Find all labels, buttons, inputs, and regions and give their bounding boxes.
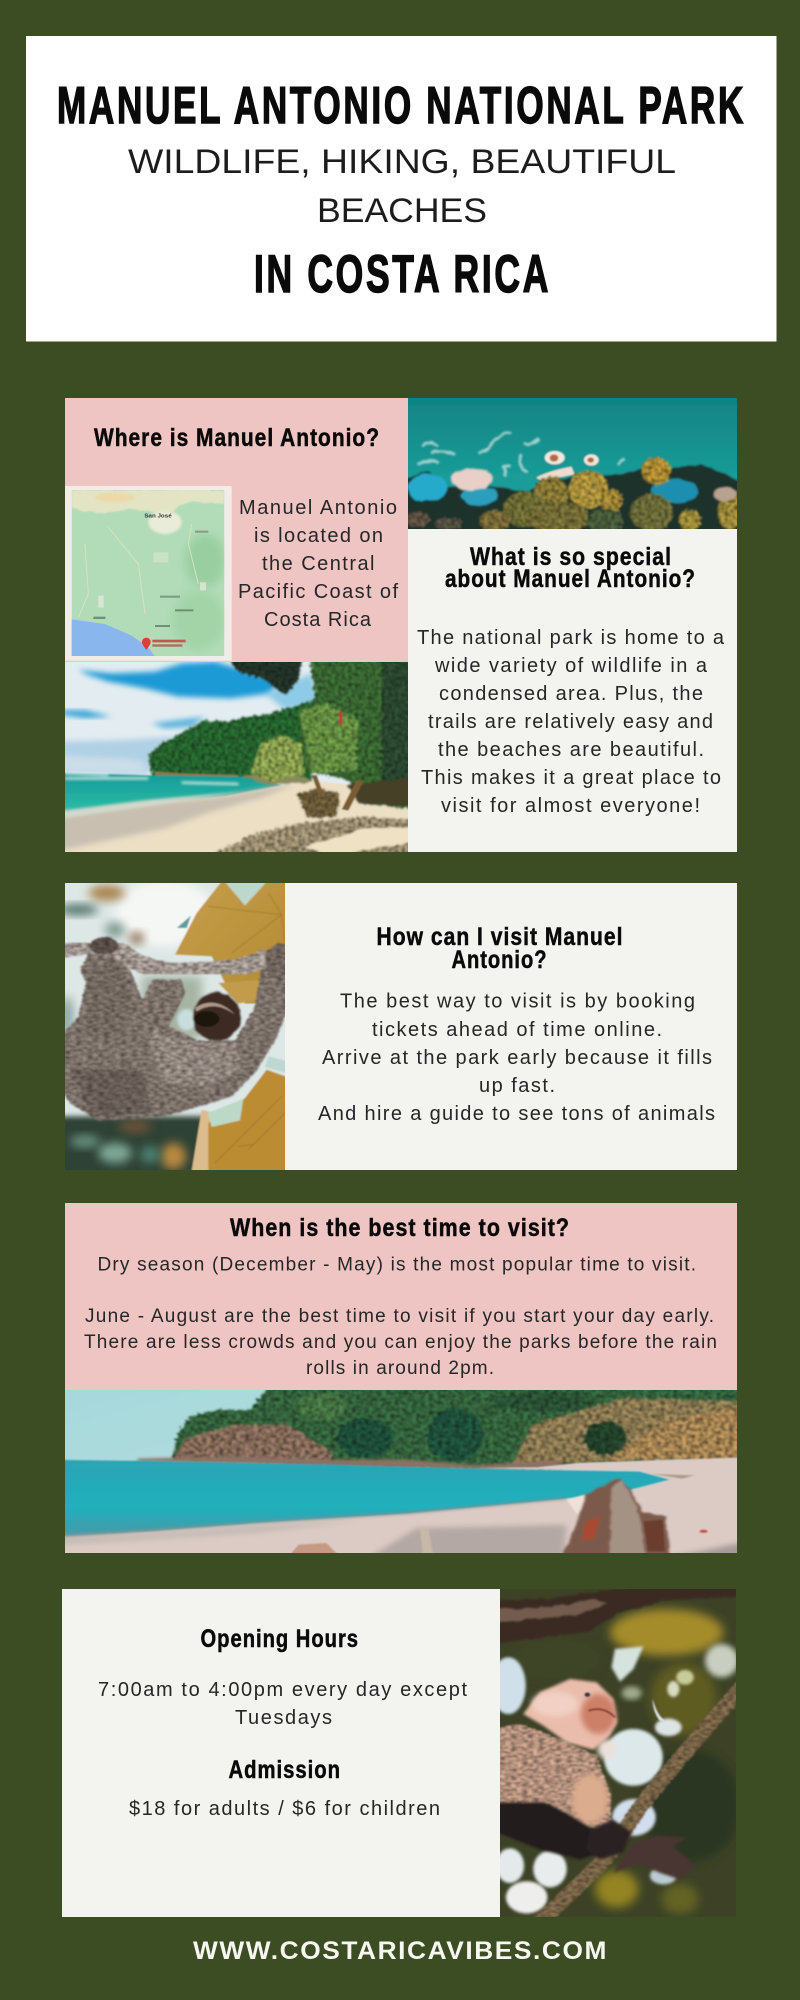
text: opening hours: 7:00am to 4:00pm every day except xyxy=(98,1679,467,1701)
text: special description: The national park is home to a xyxy=(417,627,725,649)
photo: aerial ocean and coast xyxy=(408,398,737,529)
subtitle: BEACHES xyxy=(317,192,487,230)
text: how to visit description xyxy=(318,990,715,1125)
heading: how to visit: Antonio? xyxy=(452,946,548,974)
text: best time description: rolls in around 2pm. xyxy=(306,1358,494,1379)
text: how to visit description: up fast. xyxy=(479,1075,555,1097)
heading: what is special xyxy=(445,543,696,593)
heading: what is special: What is so special xyxy=(470,543,672,571)
heading: how to visit: How can I visit Manuel xyxy=(376,923,624,951)
panel: when is the best time xyxy=(65,1203,737,1390)
panel: opening hours and admission xyxy=(62,1589,500,1917)
text: how to visit description: tickets ahead of time online. xyxy=(372,1019,662,1041)
heading: how to visit xyxy=(376,923,624,974)
text: location: is located on xyxy=(254,525,383,547)
text: how to visit description: Arrive at the park early because it fills xyxy=(322,1047,712,1069)
heading: best time: When is the best time to visit? xyxy=(230,1214,570,1242)
text: location: Manuel Antonio xyxy=(239,497,397,519)
label: San José: San José xyxy=(144,514,172,520)
text: opening hours xyxy=(98,1679,467,1729)
text: special description xyxy=(417,627,725,817)
text: admission price: $18 for adults / $6 for children xyxy=(129,1798,440,1820)
text: special description: condensed area. Plus, the xyxy=(439,683,703,705)
panel: how can I visit xyxy=(285,883,737,1170)
text: how to visit description: And hire a guide to see tons of animals xyxy=(318,1103,715,1125)
text: best time description: June - August are the best time to visit if you start your day early. xyxy=(85,1306,714,1327)
text: opening hours: Tuesdays xyxy=(235,1707,332,1729)
text: best time description: Dry season (December - May) is the most popular time to visit. xyxy=(98,1254,696,1275)
text: special description: visit for almost everyone! xyxy=(441,795,700,817)
subtitle: WILDLIFE, HIKING, BEAUTIFUL xyxy=(128,143,676,181)
map xyxy=(65,486,232,661)
text: best time description: There are less crowds and you can enjoy the parks before the rain xyxy=(84,1332,717,1353)
text: location: Costa Rica xyxy=(264,609,372,631)
panel: title xyxy=(26,36,776,342)
text: special description: the beaches are beautiful. xyxy=(438,739,704,761)
photo: beach with driftwood xyxy=(65,1390,737,1553)
footer: website: WWW.COSTARICAVIBES.COM xyxy=(193,1937,608,1965)
panel: where is Manuel Antonio xyxy=(65,398,408,662)
heading: admission: Admission xyxy=(228,1756,341,1784)
text: location xyxy=(238,497,398,631)
text: special description: This makes it a great place to xyxy=(421,767,721,789)
heading: opening hours: Opening Hours xyxy=(200,1625,359,1653)
text: special description: trails are relatively easy and xyxy=(428,711,713,733)
photo: capuchin monkey xyxy=(500,1589,736,1917)
heading: where: Where is Manuel Antonio? xyxy=(94,424,380,452)
text: location: Pacific Coast of xyxy=(238,581,398,603)
text: location: the Central xyxy=(262,553,374,575)
subtitle xyxy=(128,143,676,230)
photo: sloth on a branch xyxy=(65,883,285,1170)
heading: what is special: about Manuel Antonio? xyxy=(445,565,696,593)
text: best time description xyxy=(84,1254,717,1379)
heading: in Costa Rica: IN COSTA RICA xyxy=(254,245,551,304)
panel: what is so special xyxy=(408,529,737,852)
text: special description: wide variety of wildlife in a xyxy=(434,655,708,677)
icon: map pin xyxy=(142,638,151,650)
photo: tropical beach xyxy=(65,662,408,852)
text: how to visit description: The best way to visit is by booking xyxy=(340,990,695,1012)
